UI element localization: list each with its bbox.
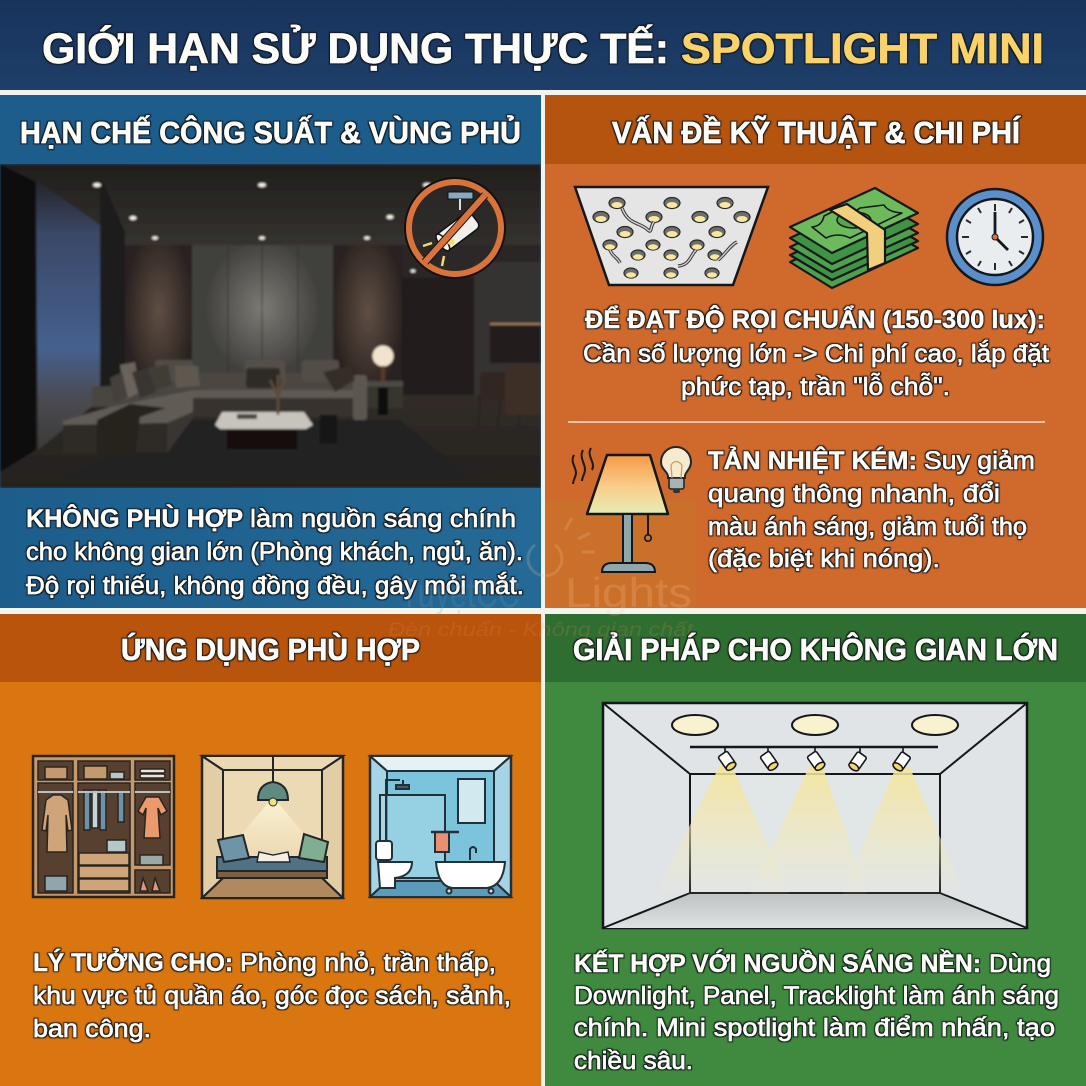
table lamp (367, 346, 403, 415)
text: poor heat dissipation: màu ánh sáng, giảm tuổi thọ (708, 513, 1027, 541)
text: combine with ambient light (574, 948, 1059, 1075)
text: poor heat dissipation: quang thông nhanh, đổi (708, 480, 1000, 508)
heading: technical and cost: VẤN ĐỀ KỸ THUẬT & CHI PHÍ (612, 114, 1021, 150)
icon: clock (947, 189, 1043, 285)
text: combine with ambient light: Downlight, Panel, Tracklight làm ánh sáng (574, 982, 1059, 1010)
watermark tint (545, 500, 696, 608)
ceiling downlights (93, 183, 431, 272)
text: ideal for: khu vực tủ quần áo, góc đọc sách, sảnh, (33, 982, 511, 1010)
text: not suitable as main light: làm nguồn sáng chính (250, 505, 516, 533)
text: combine with ambient light: chính. Mini spotlight làm điểm nhấn, tạo (574, 1014, 1055, 1042)
dining chair (480, 366, 541, 415)
heading: solution: GIẢI PHÁP CHO KHÔNG GIAN LỚN (573, 631, 1058, 667)
watermark: Đèn chuẩn - Không gian chất (388, 620, 694, 641)
text: combine with ambient light: chiều sâu. (574, 1047, 693, 1075)
text: combine with ambient light: Dùng (989, 950, 1051, 978)
icon: hot lamp and bulb (573, 447, 691, 572)
title band (0, 0, 1086, 90)
sofa (63, 360, 367, 456)
text: ideal for: LÝ TƯỞNG CHO: (33, 947, 233, 977)
text: ideal for: ban công. (33, 1015, 151, 1043)
icon: wardrobe (33, 756, 174, 897)
text: required illuminance: phức tạp, trần "lỗ chỗ". (681, 372, 950, 401)
watermark: TuyệtCC (400, 569, 520, 616)
icon: reading nook (202, 756, 343, 898)
text: not suitable as main light (26, 503, 524, 600)
text: not suitable as main light: KHÔNG PHÙ HỢP (26, 503, 243, 533)
heading: power and coverage: HẠN CHẾ CÔNG SUẤT & VÙNG PHỦ (20, 114, 521, 150)
text: poor heat dissipation (708, 445, 1035, 573)
icon: crossed-out spotlight (408, 181, 502, 275)
text: required illuminance: Cần số lượng lớn -> Chi phí cao, lắp đặt (583, 339, 1049, 368)
title: GIỚI HẠN SỬ DỤNG THỰC TẾ: (42, 24, 669, 73)
icon: stack of money (790, 188, 918, 288)
panel: technical and cost issues (545, 95, 1086, 608)
icon: bathroom (370, 756, 511, 897)
text: not suitable as main light: Độ rọi thiếu, không đồng đều, gây mỏi mắt. (26, 571, 524, 600)
panel: solution for large spaces (545, 614, 1086, 1086)
diagram: room with layered lighting (603, 703, 1027, 928)
text: ideal for (33, 947, 511, 1043)
heading: suitable applications: ỨNG DỤNG PHÙ HỢP (121, 631, 420, 667)
text: required illuminance: ĐỂ ĐẠT ĐỘ RỌI CHUẨN (150-300 lux): (585, 304, 1045, 334)
text: required illuminance (583, 304, 1049, 401)
panel: power and coverage limits (0, 95, 541, 608)
coffee table (215, 375, 337, 449)
photo: dim living room (0, 164, 541, 488)
text: poor heat dissipation: (đặc biệt khi nóng). (708, 545, 940, 573)
watermark: Lights (565, 569, 692, 616)
panel: suitable applications (0, 614, 541, 1086)
text: combine with ambient light: KẾT HỢP VỚI NGUỒN SÁNG NỀN: (574, 948, 981, 978)
text: poor heat dissipation: Suy giảm (924, 447, 1035, 475)
text: poor heat dissipation: TẢN NHIỆT KÉM: (708, 445, 917, 475)
watermark (388, 518, 694, 641)
text: not suitable as main light: cho không gian lớn (Phòng khách, ngủ, ăn). (26, 538, 523, 566)
title: SPOTLIGHT MINI (681, 25, 1044, 73)
icon: ceiling full of downlights (575, 187, 768, 285)
text: ideal for: Phòng nhỏ, trần thấp, (240, 949, 496, 977)
title (42, 24, 1044, 73)
